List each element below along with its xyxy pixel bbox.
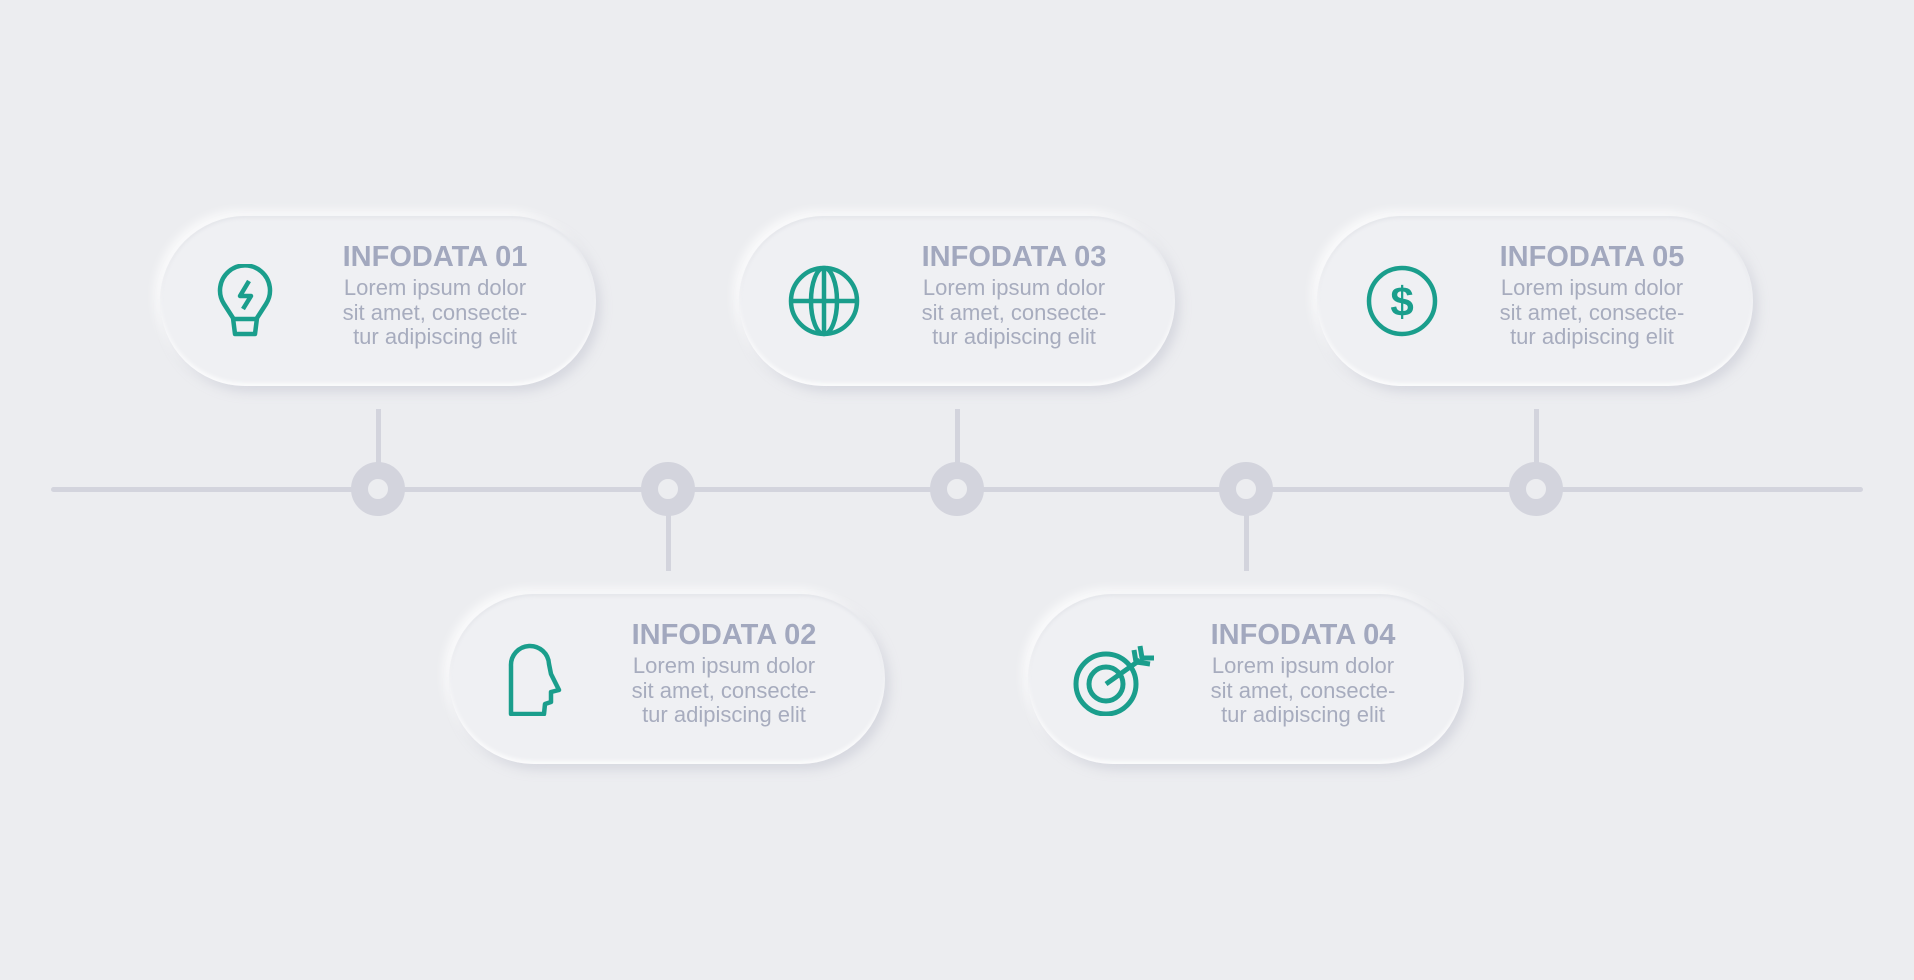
stem 2: [666, 515, 671, 571]
text: infodata 03: tur adipiscing elit: [932, 324, 1096, 349]
text: infodata 04: sit amet, consecte-: [1211, 678, 1395, 702]
text: infodata 05: tur adipiscing elit: [1510, 324, 1674, 349]
text: infodata 05: INFODATA 05: [1500, 241, 1684, 273]
text: infodata 01: tur adipiscing elit: [353, 324, 517, 349]
panel: infodata 02: [449, 594, 885, 764]
text: infodata 02: [632, 619, 816, 727]
stem 5: [1534, 409, 1539, 465]
text: infodata 03: Lorem ipsum dolor: [923, 275, 1105, 300]
text: infodata 02: Lorem ipsum dolor: [633, 653, 815, 678]
text: infodata 01: [343, 241, 527, 349]
text: infodata 03: sit amet, consecte-: [922, 300, 1106, 324]
panel: infodata 01: [160, 216, 596, 386]
text: infodata 04: Lorem ipsum dolor: [1212, 653, 1394, 678]
text: infodata 03: [922, 241, 1106, 349]
icon: globe: [788, 266, 860, 336]
text: infodata 02: sit amet, consecte-: [632, 678, 816, 702]
timeline line: [51, 487, 1863, 492]
text: infodata 03: INFODATA 03: [922, 241, 1106, 273]
icon: light bulb: [218, 264, 272, 336]
stem 4: [1244, 515, 1249, 571]
panel: infodata 05: [1317, 216, 1753, 386]
text: infodata 02: tur adipiscing elit: [642, 702, 806, 727]
node 5: [1509, 462, 1563, 516]
node 2: [641, 462, 695, 516]
icon: dollar coin: [1366, 266, 1438, 336]
panel: infodata 03: [739, 216, 1175, 386]
text: infodata 05: sit amet, consecte-: [1500, 300, 1684, 324]
node 4: [1219, 462, 1273, 516]
text: infodata 05: [1500, 241, 1684, 349]
stem 1: [376, 409, 381, 465]
icon: dollar coin: $: [1390, 278, 1414, 325]
stem 3: [955, 409, 960, 465]
text: infodata 02: INFODATA 02: [632, 619, 816, 651]
text: infodata 05: Lorem ipsum dolor: [1501, 275, 1683, 300]
text: infodata 04: INFODATA 04: [1211, 619, 1395, 651]
text: infodata 01: INFODATA 01: [343, 241, 527, 273]
text: infodata 04: [1211, 619, 1396, 727]
node 3: [930, 462, 984, 516]
text: infodata 01: sit amet, consecte-: [343, 300, 527, 324]
icon: target: [1074, 646, 1154, 716]
node 1: [351, 462, 405, 516]
panel: infodata 04: [1028, 594, 1464, 764]
icon: head: [508, 644, 562, 716]
text: infodata 01: Lorem ipsum dolor: [344, 275, 526, 300]
text: infodata 04: tur adipiscing elit: [1221, 702, 1385, 727]
